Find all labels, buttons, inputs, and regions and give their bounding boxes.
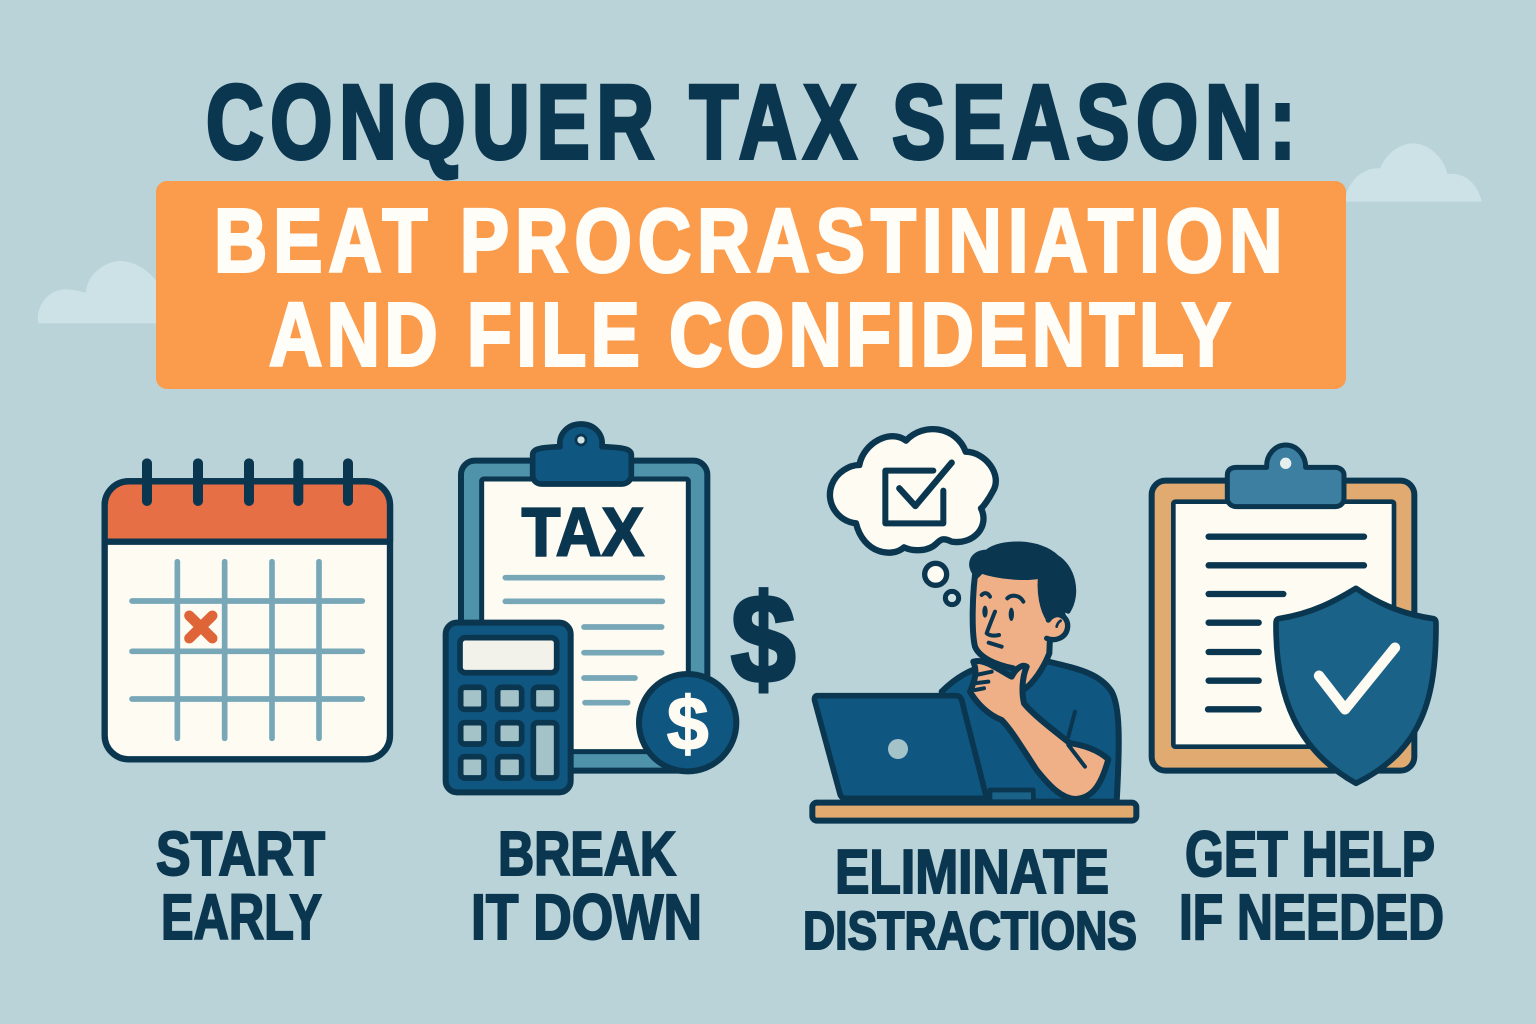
- label: eliminate distractions: [803, 838, 1137, 961]
- subtitle banner: [156, 181, 1346, 389]
- label: get help if needed: GET HELP: [1185, 818, 1435, 890]
- laptop: [814, 696, 1033, 802]
- thought cloud: [830, 429, 996, 605]
- icon: tax clipboard with calculator: [446, 424, 795, 792]
- label: start early: START: [156, 820, 325, 889]
- decorative cloud: left: [38, 261, 157, 323]
- icon: tax clipboard with calculator: $: [667, 681, 709, 765]
- label: break it down: BREAK: [498, 820, 676, 889]
- label: break it down: [471, 820, 702, 953]
- title: CONQUER TAX SEASON:: [206, 63, 1296, 181]
- label: eliminate distractions: DISTRACTIONS: [803, 901, 1137, 961]
- icon: clipboard with shield: [1152, 445, 1436, 783]
- icon: tax clipboard with calculator: $: [731, 569, 795, 709]
- desk: [812, 803, 1136, 821]
- label: get help if needed: IF NEEDED: [1179, 881, 1444, 953]
- label: eliminate distractions: ELIMINATE: [835, 838, 1109, 907]
- label: get help if needed: [1179, 818, 1444, 953]
- icon: person thinking at laptop: [812, 429, 1136, 821]
- icon: calendar: [105, 463, 390, 759]
- decorative cloud: right: [1345, 143, 1482, 202]
- subtitle line 1: BEAT PROCRASTINIATION: [214, 192, 1282, 291]
- label: break it down: IT DOWN: [471, 881, 702, 953]
- subtitle line 2: AND FILE CONFIDENTLY: [269, 286, 1231, 385]
- person: [942, 543, 1119, 802]
- label: start early: [156, 820, 325, 953]
- label: start early: EARLY: [161, 881, 322, 953]
- icon: tax clipboard with calculator: TAX: [522, 495, 644, 571]
